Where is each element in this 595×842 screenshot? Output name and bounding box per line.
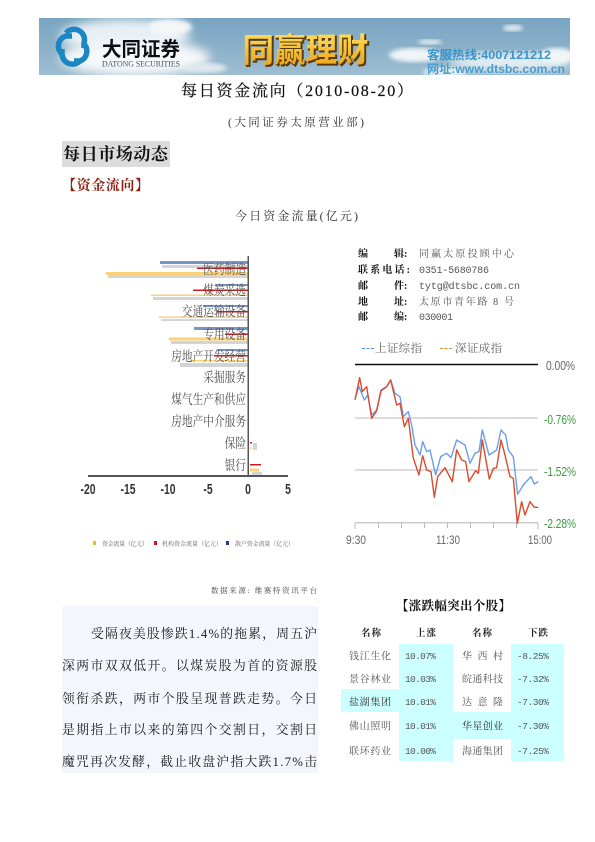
axis tick labels: 0: [245, 480, 251, 497]
sector labels: [171, 261, 247, 473]
blue retail bars: [160, 261, 248, 351]
stock names: 景谷林业: [349, 672, 391, 686]
time labels: [346, 535, 552, 547]
editor info block: tytg@dtsbc.com.cn: [419, 281, 520, 293]
editor info block: 邮: [358, 310, 368, 323]
editor info block: [358, 247, 520, 324]
stock names: 盐湖集团: [349, 696, 391, 708]
banner slogan: 同赢理财: [242, 32, 368, 68]
time labels: 9:30: [346, 535, 366, 547]
chart legend: [93, 540, 294, 548]
sector labels: 采掘服务: [203, 369, 246, 385]
percentage labels: -0.76%: [544, 412, 576, 427]
data source: 数据来源: 维赛特资讯平台: [211, 585, 318, 595]
sector labels: 煤气生产和供应: [171, 391, 246, 407]
yellow total bars: [106, 272, 259, 472]
editor info block: 太原市青年路 8 号: [419, 295, 514, 308]
percent values: -8.25%: [517, 651, 549, 662]
stock names: 皖通科技: [462, 672, 503, 686]
axes: [88, 256, 288, 477]
axis tick labels: [80, 480, 291, 497]
stock names: 华星创业: [462, 720, 503, 732]
sub heading: fund flow: 【资金流向】: [62, 177, 149, 194]
bar shadows: [108, 265, 262, 475]
percentage labels: [544, 358, 576, 531]
commentary panel: 领衔杀跌，两市个股呈现普跌走势。今日: [62, 691, 317, 707]
percent values: -7.25%: [517, 746, 549, 757]
grid lines: [355, 364, 538, 366]
company English name: DATONG SECURITIES: [102, 60, 180, 68]
sector labels: 房地产开发经营: [171, 348, 246, 364]
blue index line: [355, 380, 538, 494]
sector labels: 煤炭采选: [203, 282, 246, 298]
line chart legend: 上证综指: [375, 341, 422, 355]
commentary panel: 魔咒再次发酵，截止收盘沪指大跌1.7%击: [62, 754, 317, 770]
stock names: 钱江生化: [349, 650, 391, 662]
line chart legend: [362, 341, 502, 355]
red institution bars: [193, 268, 261, 466]
chart legend: 机构资金流量（亿元）: [162, 540, 222, 548]
percent values: 10.01%: [405, 721, 436, 732]
editor info block: 030001: [419, 313, 453, 324]
editor info block: 编:: [394, 310, 407, 323]
bar chart: fund flow by sector: [80, 256, 291, 497]
editor info block: 邮: [358, 279, 368, 292]
editor info block: 联系电话:: [358, 263, 410, 276]
percent values: [405, 651, 549, 757]
sector labels: 银行: [225, 458, 246, 473]
axis tick labels: -5: [203, 480, 213, 497]
stock names: 华 西 村: [462, 650, 503, 662]
chart legend: 散户资金流量（亿元）: [235, 540, 294, 548]
percent values: 10.07%: [405, 651, 436, 662]
editor info block: 件:: [394, 279, 407, 292]
sector labels: 房地产中介服务: [171, 413, 246, 429]
commentary panel: [62, 606, 318, 773]
percentage labels: -2.28%: [544, 516, 576, 531]
percent values: -7.32%: [517, 674, 549, 685]
subtitle: (大同证券太原营业部): [228, 115, 364, 129]
banner slogan: 同赢理财: [244, 33, 370, 70]
axis tick labels: 5: [285, 480, 291, 497]
hotline: 客服热线:4007121212: [427, 47, 551, 62]
editor info block: 编: [358, 247, 368, 260]
section heading: 每日市场动态: [63, 144, 170, 164]
table title: 【涨跌幅突出个股】: [396, 598, 511, 613]
percent values: 10.01%: [405, 697, 436, 708]
editor info block: 地: [358, 295, 368, 308]
commentary panel: 受隔夜美股惨跌1.4%的拖累，周五沪: [91, 626, 317, 642]
table header: [361, 627, 548, 639]
title: 每日资金流向（2010-08-20）: [181, 82, 413, 100]
table header: 上涨: [416, 627, 436, 639]
percent values: 10.03%: [405, 674, 436, 685]
commentary panel: 深两市双双低开。以煤炭股为首的资源股: [62, 658, 317, 673]
stock names: 海通集团: [462, 744, 503, 758]
table header: 下跌: [528, 627, 548, 639]
percent values: -7.30%: [517, 697, 549, 708]
chart title: 今日资金流量(亿元): [235, 208, 358, 223]
percent values: -7.30%: [517, 721, 549, 732]
chart legend: 资金流量（亿元）: [102, 540, 148, 548]
company name: 大同证券: [102, 38, 180, 61]
time labels: 15:00: [528, 535, 552, 547]
editor info block: 同赢太原投顾中心: [419, 247, 515, 260]
website: 网址:www.dtsbc.com.cn: [427, 61, 565, 76]
sector labels: 医药制造: [203, 261, 246, 277]
percentage labels: -1.52%: [544, 464, 576, 479]
stock names: [349, 650, 503, 758]
banner: [39, 18, 575, 77]
stock names: 达 意 隆: [462, 696, 503, 708]
axis tick labels: -10: [160, 480, 176, 497]
sector labels: 专用设备: [203, 326, 247, 342]
axis tick labels: -15: [120, 480, 136, 497]
icon: Datong logo: [58, 29, 87, 64]
time labels: 11:30: [436, 535, 460, 547]
percent values: 10.00%: [405, 746, 436, 757]
table header: 名称: [361, 627, 382, 639]
table: top movers: [341, 627, 564, 761]
stock names: 佛山照明: [349, 720, 391, 732]
axis tick labels: -20: [80, 480, 96, 497]
stock names: 联环药业: [349, 744, 391, 758]
highlighted cells: [341, 644, 564, 761]
editor info block: 0351-5680786: [419, 266, 489, 277]
commentary panel: 是期指上市以来的第四个交割日，交割日: [62, 722, 317, 738]
sector labels: 交通运输设备: [182, 303, 247, 319]
table header: 名称: [472, 627, 493, 639]
line chart: index trend: [346, 341, 576, 547]
editor info block: 辑:: [394, 247, 407, 260]
editor info block: 址:: [394, 295, 407, 308]
red index line: [355, 378, 538, 523]
sector labels: 保险: [225, 436, 246, 451]
line chart legend: 深证成指: [455, 341, 502, 355]
percentage labels: 0.00%: [546, 358, 575, 373]
